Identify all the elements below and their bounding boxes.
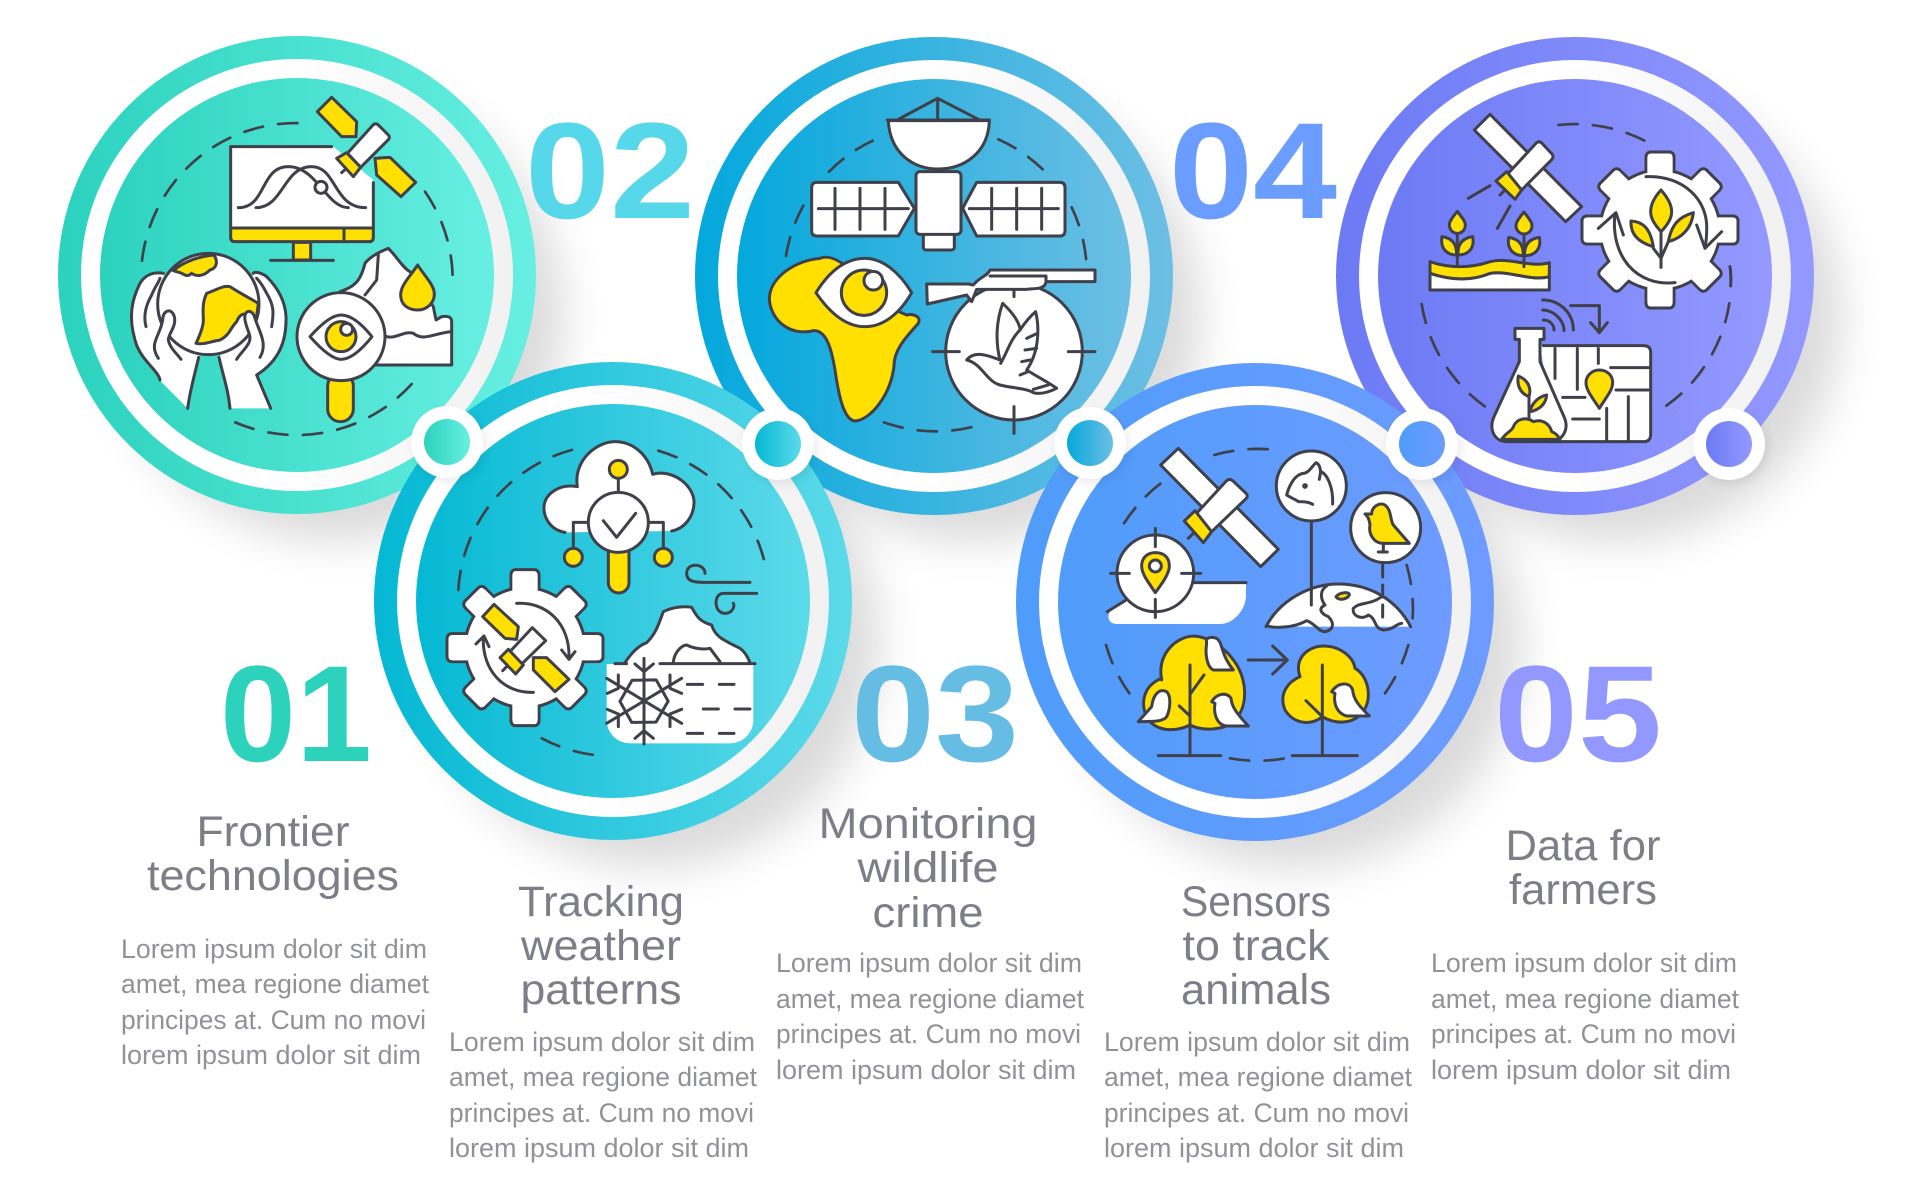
icon: frontier technologies (131, 97, 453, 435)
heading: Monitoring wildlife crime: crime (872, 889, 984, 937)
number 01: 01 (220, 638, 372, 791)
heading: Tracking weather patterns: weather (520, 922, 681, 970)
panel: circle 5 disc (1336, 37, 1814, 515)
text: block 3: amet, mea regione diamet (776, 984, 1084, 1014)
text: block 2: Lorem ipsum dolor sit dim (449, 1027, 755, 1057)
text: block 2: lorem ipsum dolor sit dim (449, 1133, 749, 1163)
panel: circle 4 disc (1016, 363, 1494, 841)
number 02: 02 (525, 95, 695, 248)
text: block 4: principes at. Cum no movi (1104, 1098, 1409, 1128)
icon: monitoring wildlife crime (769, 98, 1095, 433)
text: block 1: lorem ipsum dolor sit dim (121, 1040, 421, 1070)
panel: circle 3 disc (695, 37, 1173, 515)
heading: Monitoring wildlife crime: Monitoring (818, 800, 1038, 848)
heading: Sensors to track animals: animals (1181, 966, 1331, 1014)
text: block 2: amet, mea regione diamet (449, 1062, 757, 1092)
text: block 4: amet, mea regione diamet (1104, 1062, 1412, 1092)
text: block 3: Lorem ipsum dolor sit dim (776, 948, 1082, 978)
text: block 1: principes at. Cum no movi (121, 1005, 426, 1035)
number 04: 04 (1169, 95, 1337, 248)
text: block 5: amet, mea regione diamet (1431, 984, 1739, 1014)
text: block 3: principes at. Cum no movi (776, 1019, 1081, 1049)
heading: Data for farmers: farmers (1509, 866, 1657, 914)
heading: Sensors to track animals: Sensors (1181, 878, 1331, 926)
heading: Tracking weather patterns: Tracking (518, 878, 684, 926)
panel: circle 1 disc (58, 36, 536, 514)
icon: sensors to track animals (1106, 448, 1421, 761)
text: block 3: lorem ipsum dolor sit dim (776, 1055, 1076, 1085)
heading: Data for farmers: Data for (1506, 822, 1660, 870)
circle shadows (111, 89, 1841, 868)
text: block 1: Lorem ipsum dolor sit dim (121, 934, 427, 964)
text: block 5: lorem ipsum dolor sit dim (1431, 1055, 1731, 1085)
text: block 4: lorem ipsum dolor sit dim (1104, 1133, 1404, 1163)
heading: Tracking weather patterns: patterns (520, 966, 682, 1014)
icon: data for farmers (1422, 114, 1738, 442)
text: block 1: amet, mea regione diamet (121, 969, 429, 999)
connector dots (411, 406, 1768, 484)
text: block 5: Lorem ipsum dolor sit dim (1431, 948, 1737, 978)
heading: Frontier technologies: technologies (147, 852, 399, 900)
icon: tracking weather patterns (447, 442, 765, 755)
panel: circle 2 disc (374, 362, 852, 840)
number 05: 05 (1494, 638, 1662, 791)
heading: Monitoring wildlife crime: wildlife (856, 844, 998, 892)
heading: Sensors to track animals: to track (1182, 922, 1330, 970)
text: block 4: Lorem ipsum dolor sit dim (1104, 1027, 1410, 1057)
number 03: 03 (851, 638, 1019, 791)
text: block 2: principes at. Cum no movi (449, 1098, 754, 1128)
heading: Frontier technologies: Frontier (196, 808, 350, 856)
text: block 5: principes at. Cum no movi (1431, 1019, 1736, 1049)
